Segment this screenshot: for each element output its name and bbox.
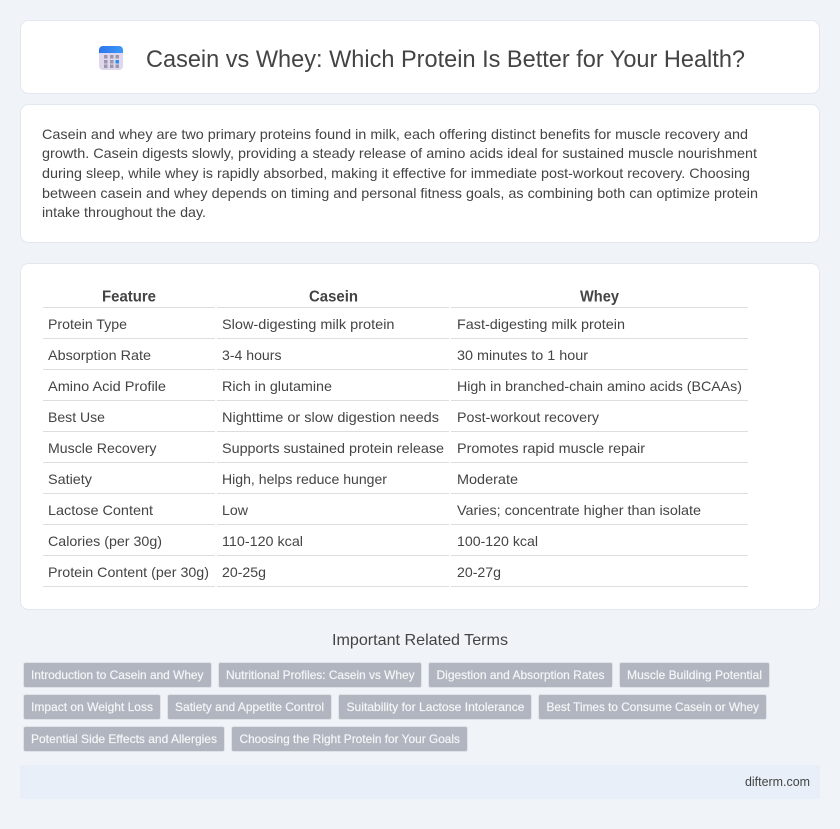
tag [620, 662, 770, 688]
tag [24, 694, 160, 720]
tag: Potential Side Effects and Allergies [31, 732, 217, 746]
table row: best use: Post-workout recovery [457, 409, 599, 425]
table row: muscle recovery: Promotes rapid muscle repair [457, 440, 645, 456]
table row: best use [48, 409, 599, 425]
tag: Satiety and Appetite Control [175, 700, 324, 714]
tag [428, 662, 612, 688]
icon: calendar [99, 46, 123, 70]
footer [20, 765, 820, 799]
table row: satiety [48, 471, 518, 487]
table row: protein content [48, 564, 501, 580]
title: Casein vs Whey: Which Protein Is Better for Your Health? [146, 46, 745, 73]
table row: muscle recovery [48, 440, 645, 456]
table row: satiety: High, helps reduce hunger [222, 471, 387, 487]
tag: Introduction to Casein and Whey [31, 668, 204, 682]
table row: calories [48, 533, 538, 549]
table row: muscle recovery: Muscle Recovery [48, 440, 156, 456]
table row: lactose content: Lactose Content [48, 502, 153, 518]
table header [102, 288, 619, 306]
table row: best use: Nighttime or slow digestion needs [222, 409, 439, 425]
text block: introduction paragraph: intake throughout the day. [42, 204, 206, 220]
table header: Whey [580, 288, 619, 306]
table row: absorption rate: 3-4 hours [222, 347, 282, 363]
table row: absorption rate: 30 minutes to 1 hour [457, 347, 588, 363]
text block: introduction paragraph: between casein and whey depends on timing and personal fitness goals, as combining both can optimize protein [42, 185, 758, 201]
table row: protein content: 20-25g [222, 564, 266, 580]
text block: introduction paragraph: during sleep, while whey is rapidly absorbed, making it effective for immediate post-workout recovery. Choosing [42, 165, 750, 181]
heading: important related terms: Important Related Terms [332, 632, 508, 649]
table row: lactose content: Varies; concentrate higher than isolate [457, 502, 701, 518]
table row: satiety: Moderate [457, 471, 518, 487]
table header: Casein [309, 288, 358, 306]
panel: introduction [20, 104, 820, 242]
table row: protein type: Slow-digesting milk protein [222, 316, 394, 332]
table row: amino acid profile: Rich in glutamine [222, 378, 332, 394]
table row: satiety: Satiety [48, 471, 92, 487]
tag: Suitability for Lactose Intolerance [346, 700, 525, 714]
table row: protein content: 20-27g [457, 564, 501, 580]
tag [24, 726, 224, 752]
tag [338, 694, 532, 720]
tag [218, 662, 422, 688]
panel: header [20, 20, 820, 94]
table row: lactose content: Low [222, 502, 249, 518]
table row: protein type [48, 316, 625, 332]
table row: amino acid profile: Amino Acid Profile [48, 378, 166, 394]
table row: best use: Best Use [48, 409, 105, 425]
table row: calories: 100-120 kcal [457, 533, 538, 549]
tag [24, 662, 212, 688]
table row: protein content: Protein Content (per 30g) [48, 564, 209, 580]
text block: introduction paragraph: growth. Casein digests slowly, providing a steady release of amino acids ideal for sustained muscle nourishment [42, 145, 757, 161]
tag: Impact on Weight Loss [31, 700, 153, 714]
tag: Digestion and Absorption Rates [436, 668, 604, 682]
table row: calories: Calories (per 30g) [48, 533, 162, 549]
table header: Feature [102, 288, 156, 306]
tag [168, 694, 332, 720]
table row: amino acid profile: High in branched-chain amino acids (BCAAs) [457, 378, 742, 394]
table row: muscle recovery: Supports sustained protein release [222, 440, 444, 456]
table row: absorption rate: Absorption Rate [48, 347, 151, 363]
table row: amino acid profile [48, 378, 742, 394]
panel: comparison table [20, 264, 820, 610]
tag: Nutritional Profiles: Casein vs Whey [226, 668, 414, 682]
tag list: related terms [24, 662, 770, 752]
table row: absorption rate [48, 347, 588, 363]
tag: Best Times to Consume Casein or Whey [546, 700, 759, 714]
table row: calories: 110-120 kcal [222, 533, 303, 549]
tag: Muscle Building Potential [627, 668, 762, 682]
tag [232, 726, 468, 752]
text block: introduction paragraph: Casein and whey are two primary proteins found in milk, each offering distinct benefits for muscle recovery and [42, 126, 748, 142]
tag: Choosing the Right Protein for Your Goals [240, 732, 460, 746]
tag [538, 694, 766, 720]
table row: protein type: Fast-digesting milk protein [457, 316, 625, 332]
table row: protein type: Protein Type [48, 316, 127, 332]
table row: lactose content [48, 502, 701, 518]
text block: introduction paragraph [42, 126, 758, 220]
footer: difterm.com [745, 774, 810, 789]
